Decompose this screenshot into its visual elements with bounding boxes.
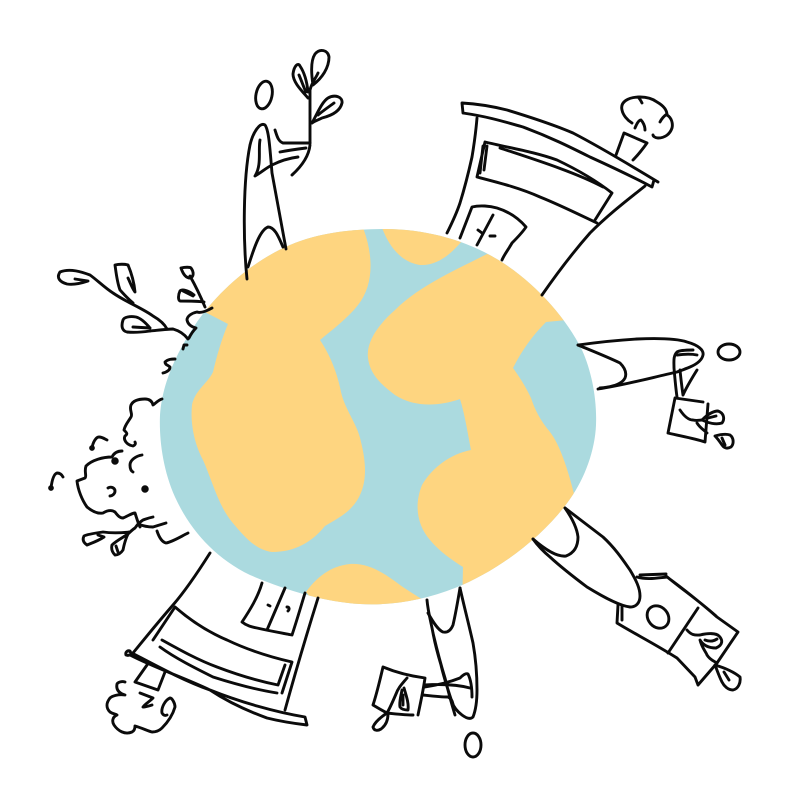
roof [462, 103, 658, 187]
bag [617, 574, 738, 685]
roof [126, 651, 307, 725]
clouds: left foliage [50, 308, 212, 555]
body [244, 124, 286, 279]
ocean [160, 229, 596, 604]
person: bottom with bag [373, 588, 481, 757]
lower leaves [83, 517, 188, 555]
plant [373, 678, 408, 730]
upper cloud fragments [163, 308, 212, 373]
arm [255, 130, 310, 176]
bag [373, 667, 425, 715]
cloud details [51, 437, 142, 496]
inner arch [533, 508, 578, 556]
door [460, 206, 526, 260]
head [465, 733, 481, 757]
body [427, 588, 477, 718]
inner arch [248, 227, 283, 267]
land masses [192, 229, 574, 604]
plant: left branches [58, 264, 205, 339]
plant [293, 50, 342, 143]
bag [668, 398, 708, 442]
globe [160, 220, 600, 615]
smoke [107, 682, 175, 733]
plant [702, 411, 733, 448]
inner arch [428, 588, 460, 632]
continent: east [368, 254, 574, 585]
inner arch [578, 345, 626, 388]
continent: west [192, 225, 371, 552]
chimney [135, 665, 165, 690]
person: bottom right with bag [533, 508, 740, 690]
head [253, 80, 275, 110]
building: bottom left [107, 553, 318, 733]
small sprig [178, 267, 205, 307]
walls [447, 118, 645, 295]
illustration: people and buildings around a globe [48, 49, 742, 758]
plant [687, 630, 740, 690]
continent: south [306, 564, 421, 604]
branch with leaves [58, 264, 188, 339]
body [578, 339, 703, 389]
window [477, 142, 612, 223]
building: top right [447, 97, 672, 295]
arm [423, 674, 472, 706]
chimney [616, 133, 647, 160]
divider [668, 608, 698, 653]
big cloud [77, 451, 140, 527]
middle cloud [124, 399, 162, 446]
window [153, 607, 292, 693]
arm [674, 350, 697, 397]
continent: north islet [382, 229, 461, 265]
door [242, 583, 305, 635]
smoke [622, 97, 672, 138]
walls [133, 553, 318, 710]
head [718, 344, 740, 360]
body [533, 508, 640, 607]
bag hole [643, 601, 673, 633]
person: top with plant [244, 50, 342, 279]
person: right with bag [578, 339, 740, 448]
